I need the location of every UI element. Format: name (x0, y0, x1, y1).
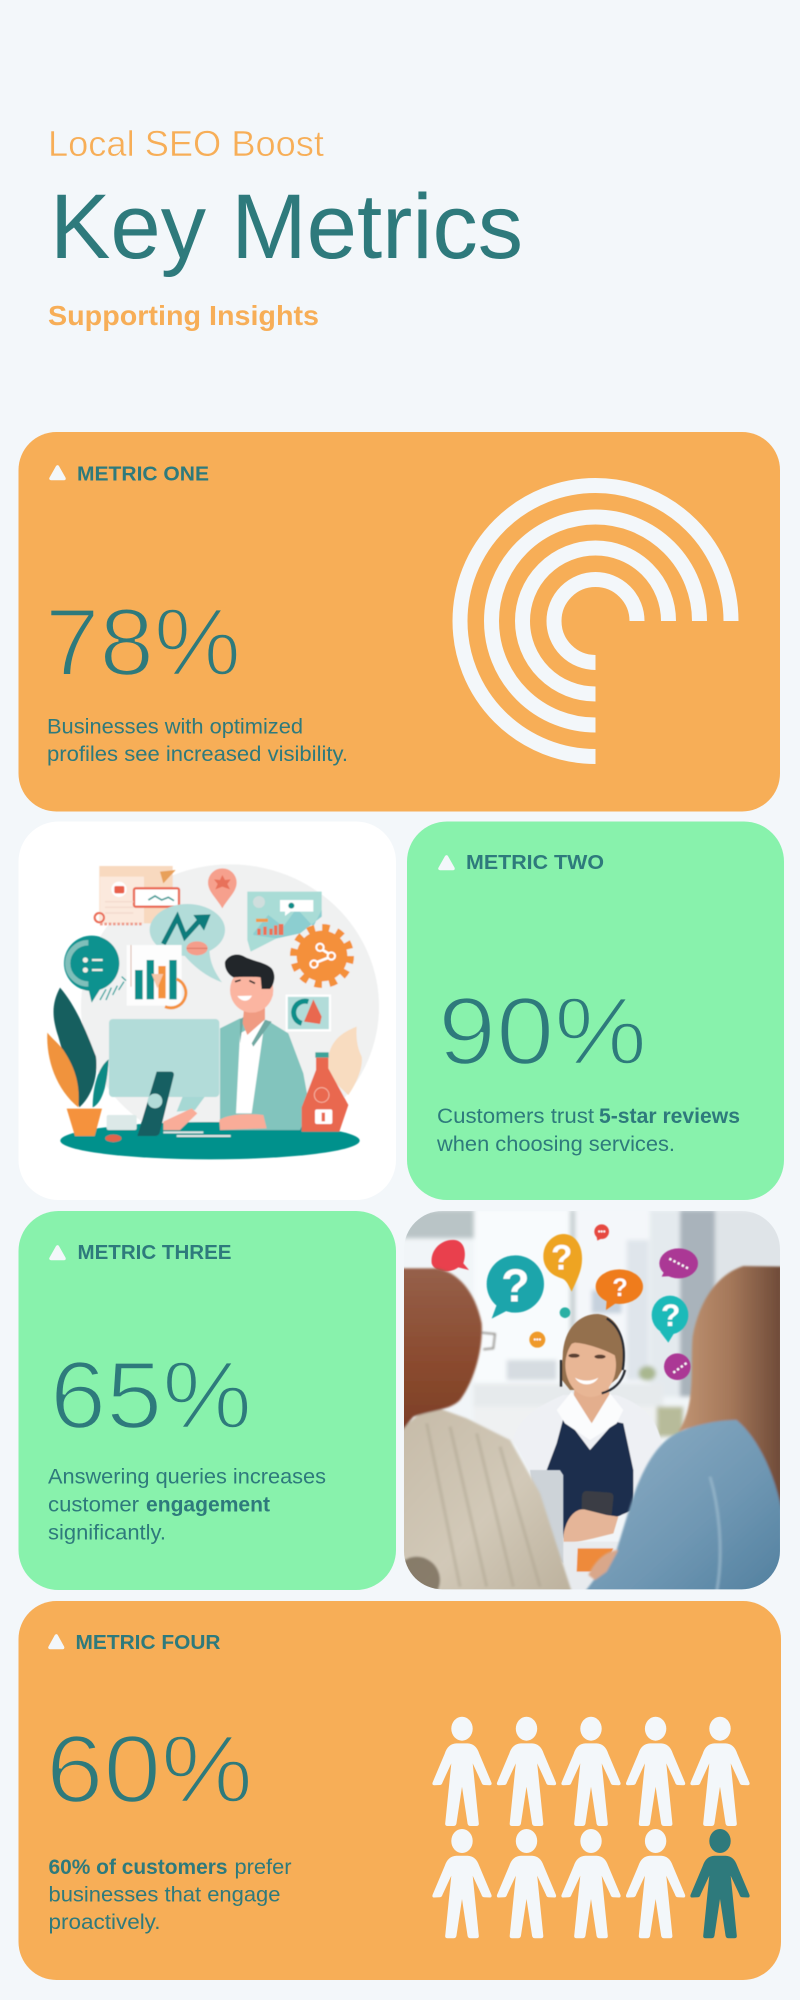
icon: triangle bullet (50, 1636, 63, 1648)
description: profiles see increased visibility. (47, 743, 348, 766)
pictogram: ten people, one highlighted (432, 1717, 750, 1938)
icon: highlighted person (690, 1829, 750, 1938)
amber question bubble (543, 1234, 582, 1292)
monitor (109, 1019, 219, 1112)
hair (678, 1266, 782, 1510)
card background (407, 822, 784, 1200)
description: businesses that engage (48, 1884, 280, 1906)
eyebrow: Local SEO Boost: Local SEO Boost (48, 123, 324, 164)
stat: 60%: 60% (46, 1716, 253, 1823)
panel: customer service photo (393, 1210, 787, 1603)
desk (60, 1122, 360, 1159)
map pin (208, 868, 237, 908)
description: Businesses with optimized (47, 716, 303, 738)
trend speech bubble (150, 904, 225, 982)
hair (400, 1268, 482, 1433)
speech bubbles with question marks (432, 1224, 698, 1380)
teal question bubble (487, 1255, 544, 1319)
description: when choosing services. (436, 1133, 675, 1156)
denim jacket (585, 1417, 782, 1592)
woman with headset (546, 1313, 660, 1542)
tan hand (588, 1550, 618, 1580)
teal question bubble right (652, 1296, 688, 1343)
small amber bubble: ••• (533, 1335, 542, 1344)
shirt (546, 1396, 660, 1516)
stat: 90%: 90% (438, 978, 647, 1085)
card background (18, 822, 396, 1200)
panel: metric one (18, 432, 780, 812)
amber question bubble: ? (551, 1238, 572, 1277)
glasses (482, 1333, 495, 1349)
header block (48, 123, 523, 331)
orange question bubble (596, 1269, 643, 1310)
document with chart (95, 866, 179, 924)
hand (563, 1509, 618, 1545)
description (436, 1105, 740, 1156)
small teal dot (560, 1307, 570, 1318)
hair back (561, 1314, 624, 1390)
description: Answering queries increases (48, 1466, 326, 1488)
potted plant (47, 988, 109, 1136)
purple bubble lower (664, 1353, 691, 1380)
panel: metric two (407, 822, 784, 1200)
stat: 65%: 65% (50, 1342, 252, 1449)
teal question bubble right: ? (661, 1297, 680, 1333)
bar chart card (127, 945, 186, 1008)
description: engagement (146, 1494, 270, 1516)
pale leaf (328, 1027, 362, 1095)
backdrop blob (81, 864, 379, 1149)
person (219, 954, 310, 1130)
phone (582, 1491, 613, 1515)
label: metric four: METRIC FOUR (76, 1632, 221, 1654)
title: Key Metrics: Key Metrics (50, 176, 523, 278)
pie chart card (287, 996, 330, 1030)
icon: triangle bullet (51, 467, 64, 478)
description: customer (48, 1494, 139, 1516)
window background (406, 1211, 780, 1440)
icon: triangle bullet (440, 857, 453, 868)
chart bubble panel (247, 892, 322, 952)
face (564, 1342, 617, 1392)
laptop (137, 1072, 231, 1136)
label: metric one: METRIC ONE (77, 464, 209, 486)
sweater (400, 1405, 572, 1592)
purple bubble (659, 1248, 698, 1278)
bottle with lock (302, 1052, 348, 1132)
card background (18, 432, 780, 812)
jacket seam (710, 1477, 720, 1592)
left customer (393, 1268, 572, 1603)
label: metric three: METRIC THREE (78, 1242, 232, 1264)
small red bubble: ••• (598, 1227, 606, 1236)
apron (547, 1418, 633, 1538)
description: proactively. (48, 1911, 160, 1934)
panel: metric four (18, 1601, 781, 1980)
illustration: man at computer with marketing icons (47, 864, 379, 1159)
collar (557, 1392, 623, 1440)
teal question bubble: ? (501, 1259, 530, 1311)
description: Customers trust (437, 1105, 594, 1128)
teal speech icon (64, 936, 126, 1003)
gear icon (294, 928, 350, 984)
description: prefer (234, 1856, 292, 1879)
orange question bubble: ? (612, 1274, 628, 1302)
panel: marketer illustration (18, 822, 396, 1200)
stat: 78%: 78% (45, 589, 241, 696)
card background (18, 1601, 781, 1980)
neck (573, 1383, 610, 1423)
icon: concentric arcs (460, 486, 731, 756)
icon: triangle bullet (51, 1247, 64, 1258)
headset (561, 1318, 625, 1393)
small amber bubble (529, 1332, 545, 1348)
description: significantly. (48, 1522, 166, 1544)
desk objects (105, 1115, 137, 1142)
small red bubble (594, 1224, 609, 1241)
label: metric two: METRIC TWO (466, 852, 604, 874)
description: 60% of customers (48, 1856, 228, 1879)
subtitle: Supporting Insights: Supporting Insights (48, 300, 319, 331)
description (48, 1856, 292, 1934)
table and tablet (530, 1469, 618, 1589)
right customer (585, 1266, 782, 1592)
sweater shadow corner (405, 1556, 442, 1589)
description (48, 1466, 326, 1544)
panel: metric three (18, 1211, 396, 1590)
card background (18, 1211, 396, 1590)
sweater ribs (427, 1423, 540, 1587)
description: 5-star reviews (599, 1105, 740, 1128)
description (47, 716, 348, 766)
red bubble (432, 1240, 469, 1271)
